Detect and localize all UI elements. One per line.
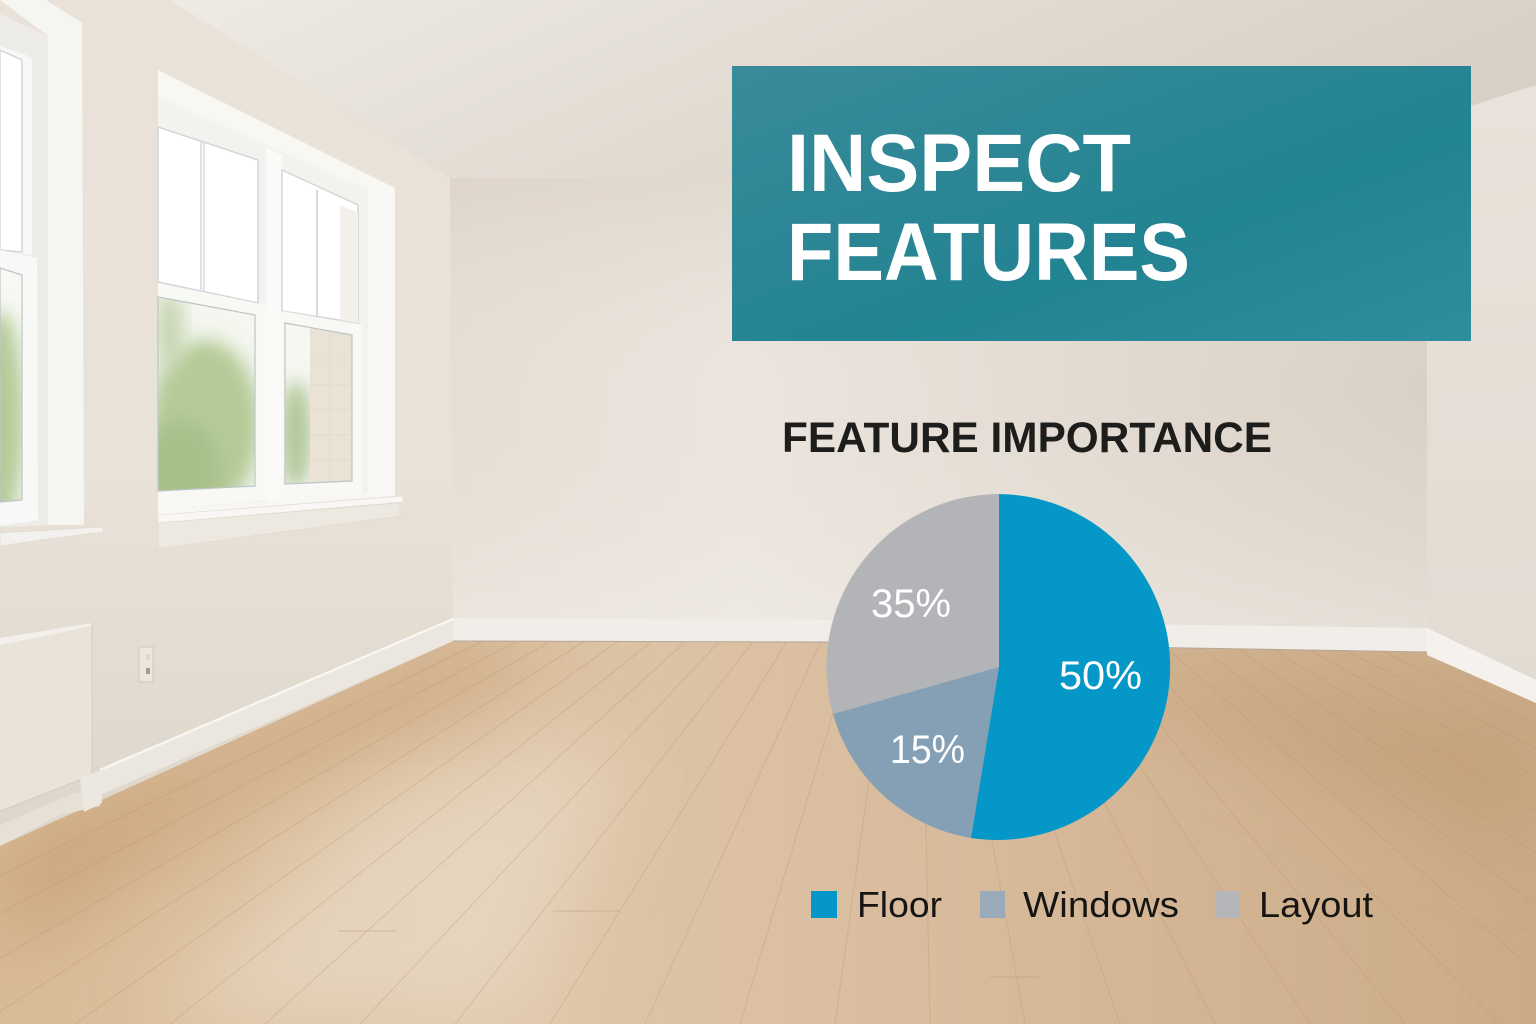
left wall: [0, 0, 453, 846]
legend item: floor: [811, 884, 942, 925]
right double window: [140, 70, 403, 548]
radiator cover: [0, 623, 102, 812]
right wall: [1427, 85, 1536, 703]
window reveal: [158, 70, 395, 515]
label: 35%: 35%: [871, 582, 951, 626]
window frame: [158, 97, 368, 510]
slice: windows 15%: [833, 667, 999, 838]
legend item: floor: Floor: [857, 884, 942, 925]
chart heading: FEATURE IMPORTANCE: [782, 414, 1272, 462]
legend item: layout: [1215, 884, 1373, 925]
right wall baseboard: [1427, 628, 1536, 703]
title text: INSPECT: [787, 118, 1131, 209]
lower glass left with trees: [157, 296, 256, 492]
slice: layout 35%: [826, 494, 999, 714]
upper glass right: [282, 170, 358, 323]
back wall baseboards: [453, 618, 1427, 652]
title text: [787, 118, 1190, 298]
title banner: [732, 66, 1471, 341]
label: 15%: 15%: [890, 728, 965, 772]
legend: [811, 884, 1373, 925]
legend item: layout: Layout: [1259, 884, 1373, 925]
title text: FEATURES: [787, 207, 1190, 298]
floor: [0, 641, 1536, 1024]
back wall: [450, 178, 1427, 643]
lower sash left: [158, 283, 266, 510]
ceiling: [170, 0, 1536, 178]
left wall baseboard: [0, 618, 453, 846]
lower glass right with tree and building: [280, 323, 352, 490]
lower sash right: [282, 311, 362, 500]
label: 50%: 50%: [1059, 654, 1142, 698]
legend item: windows: Windows: [1023, 884, 1179, 925]
window sill: [158, 496, 403, 548]
left window sill: [0, 527, 103, 546]
left window: [0, 0, 103, 546]
slice: floor 50%: [971, 494, 1170, 840]
wall outlet: [139, 647, 153, 682]
pie chart: [826, 494, 1170, 840]
upper glass left: [158, 127, 258, 303]
